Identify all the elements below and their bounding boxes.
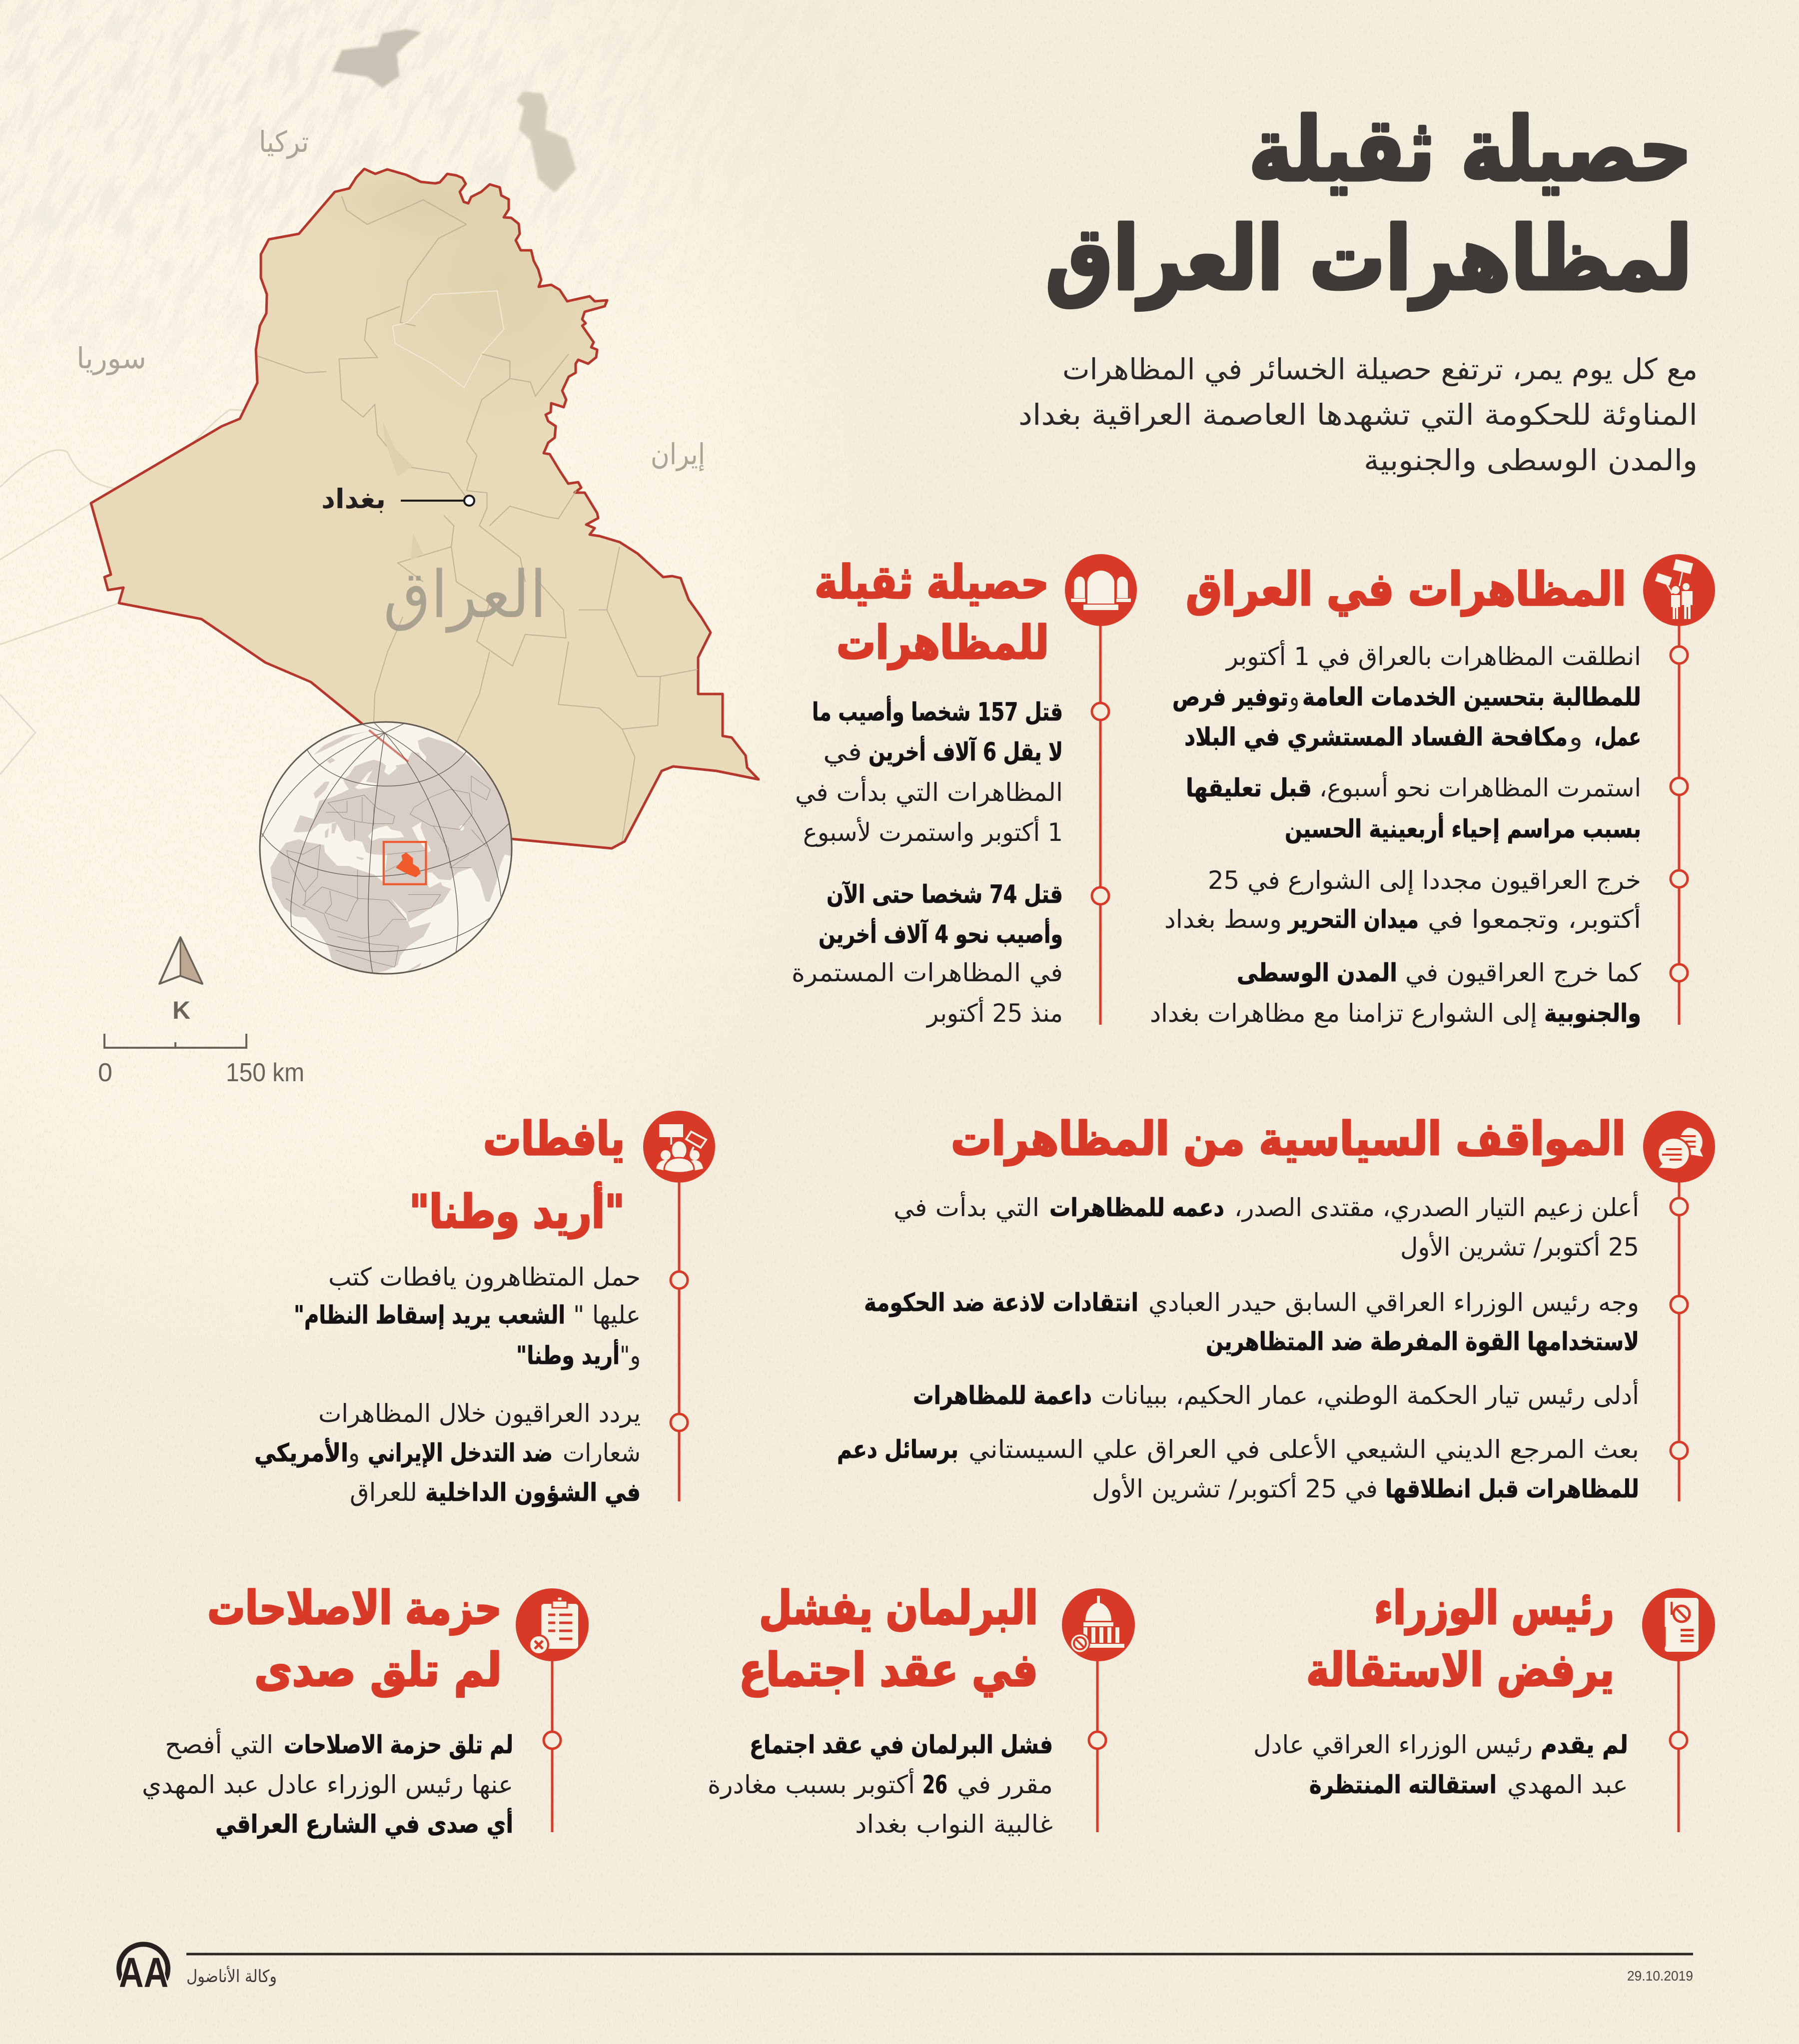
body text: كما خرج العراقيون في: [1405, 958, 1641, 987]
body text: الأمريكي: [254, 1437, 348, 1468]
body text: في المظاهرات المستمرة: [792, 958, 1063, 987]
body text: استمرت المظاهرات نحو أسبوع،: [1319, 771, 1641, 802]
body text: أكتوبر بسبب مغادرة: [708, 1768, 915, 1799]
map of Iraq: [91, 115, 759, 848]
panel: banners: [254, 1111, 715, 1507]
timeline: [1089, 1656, 1106, 1832]
body text: و": [620, 1341, 641, 1370]
body text: المدن الوسطى: [1237, 958, 1397, 988]
intro text: والمدن الوسطى والجنوبية: [1364, 443, 1698, 478]
body text: [1150, 640, 1641, 1028]
body text: في: [823, 737, 862, 766]
panel: prime minister: [1253, 1581, 1715, 1832]
panel: protests in Iraq: [1150, 554, 1715, 1028]
body text: أكتوبر، وتجمعوا في: [1428, 903, 1641, 934]
body text: حمل المتظاهرون يافطات كتب: [328, 1263, 641, 1292]
body text: و: [1288, 682, 1299, 712]
timeline: [1092, 625, 1109, 1025]
body text: رئيس الوزراء العراقي عادل: [1253, 1730, 1533, 1759]
scale bar: 150 km: [226, 1058, 304, 1087]
heading: رئيس الوزراء: [1374, 1581, 1614, 1635]
Baghdad marker: بغداد: [321, 483, 386, 515]
body text: أريد وطنا": [516, 1339, 620, 1370]
body text: والجنوبية: [1544, 999, 1641, 1028]
intro text: مع كل يوم يمر، ترتفع حصيلة الخسائر في المظاهرات: [1062, 352, 1698, 387]
body text: بعث المرجع الديني الشيعي الأعلى في العراق علي السيستاني: [968, 1434, 1639, 1464]
body text: دعمه للمظاهرات: [1049, 1193, 1224, 1223]
timeline: [671, 1179, 688, 1501]
footer: [119, 1944, 1693, 1996]
north arrow: K: [172, 996, 190, 1024]
agency name: وكالة الأناضول: [186, 1966, 277, 1987]
body text: و: [1568, 722, 1583, 752]
body text: بسبب مراسم إحياء أربعينية الحسين: [1285, 812, 1641, 844]
Baghdad marker: [321, 483, 474, 515]
timeline: [544, 1656, 561, 1832]
heading: [815, 556, 1049, 670]
panel: heavy toll: [792, 554, 1137, 1028]
body text: مقرر في: [957, 1770, 1053, 1799]
body text: و: [347, 1438, 360, 1468]
body text: الشعب يريد إسقاط النظام": [294, 1301, 565, 1330]
icon: capitol with prohibition: [1062, 1588, 1135, 1661]
icon: crowd with signs: [643, 1111, 715, 1183]
heading: "أريد وطنا": [409, 1182, 625, 1239]
body text: للمظاهرات قبل انطلاقها: [1385, 1474, 1639, 1504]
heading: في عقد اجتماع: [739, 1643, 1038, 1697]
heading: المظاهرات في العراق: [1186, 563, 1626, 617]
heading: المواقف السياسية من المظاهرات: [951, 1112, 1626, 1166]
body text: عبد المهدي: [1507, 1770, 1628, 1800]
body text: 26: [922, 1770, 947, 1799]
body text: غالبية النواب بغداد: [855, 1810, 1053, 1839]
timeline: [1670, 1656, 1687, 1832]
heading: [207, 1581, 502, 1697]
body text: أدلى رئيس تيار الحكمة الوطني، عمار الحكيم، ببيانات: [1101, 1379, 1639, 1410]
body text: [1253, 1730, 1628, 1800]
body text: ضد التدخل الإيراني: [368, 1438, 553, 1468]
body text: المظاهرات التي بدأت في: [795, 776, 1063, 807]
panel: political positions: [837, 1111, 1715, 1504]
body text: قبل تعليقها: [1186, 773, 1312, 803]
heading: للمظاهرات: [837, 616, 1049, 670]
body text: قتل 74 شخصا حتى الآن: [827, 880, 1063, 909]
timeline: [1671, 625, 1688, 1025]
body text: في الشؤون الداخلية: [425, 1478, 641, 1507]
body text: 1 أكتوبر واستمرت لأسبوع: [803, 816, 1063, 847]
map label: Syria: سوريا: [76, 341, 146, 376]
heading: حصيلة ثقيلة: [815, 556, 1049, 609]
heading: البرلمان يفشل: [759, 1581, 1038, 1635]
body text: توفير فرص: [1172, 682, 1288, 712]
body text: استقالته المنتظرة: [1309, 1770, 1497, 1800]
icon: memorial arches: [1065, 554, 1137, 626]
title: حصيلة ثقيلة: [1249, 99, 1692, 201]
title: لمظاهرات العراق: [1045, 208, 1692, 310]
body text: 25 أكتوبر/ تشرين الأول: [1400, 1231, 1639, 1262]
body text: مكافحة الفساد المستشري في البلاد: [1184, 722, 1568, 752]
locator globe: [260, 722, 512, 974]
icon: clipboard with x: [516, 1588, 589, 1661]
body text: في 25 أكتوبر/ تشرين الأول: [1092, 1472, 1378, 1504]
body text: لا يقل 6 آلاف أخرين: [869, 735, 1063, 767]
body text: [142, 1728, 513, 1839]
body text: برسائل دعم: [837, 1435, 958, 1464]
date: 29.10.2019: [1627, 1968, 1693, 1984]
body text: يردد العراقيون خلال المظاهرات: [318, 1399, 641, 1428]
body text: قتل 157 شخصا وأصيب ما: [812, 695, 1063, 727]
body text: عليها ": [573, 1301, 641, 1330]
icon: document with prohibition: [1642, 1588, 1715, 1661]
body text: أي صدى في الشارع العراقي: [215, 1808, 513, 1839]
body text: منذ 25 أكتوبر: [925, 997, 1063, 1028]
body text: لم تلق حزمة الاصلاحات: [284, 1730, 513, 1760]
logo: Anadolu Agency: AA: [119, 1949, 168, 1996]
panel: parliament: [708, 1581, 1135, 1839]
body text: [837, 1191, 1639, 1504]
body text: [254, 1263, 641, 1507]
body text: [792, 695, 1063, 1028]
heading: حزمة الاصلاحات: [207, 1581, 502, 1635]
body text: شعارات: [563, 1438, 641, 1467]
body text: خرج العراقيون مجددا إلى الشوارع في 25: [1208, 866, 1641, 895]
body text: للعراق: [350, 1478, 417, 1507]
body text: انطلقت المظاهرات بالعراق في 1 أكتوبر: [1225, 640, 1641, 671]
body text: وأصيب نحو 4 آلاف أخرين: [819, 918, 1063, 949]
body text: لم يقدم: [1541, 1730, 1628, 1759]
body text: التي أفصح: [165, 1728, 273, 1760]
body text: للمطالبة بتحسين الخدمات العامة: [1302, 682, 1641, 712]
body text: [708, 1730, 1053, 1839]
map label: Iran: إيران: [651, 437, 705, 472]
heading: [739, 1581, 1038, 1697]
icon: speech bubbles: [1643, 1111, 1715, 1183]
scale bar: 0: [98, 1058, 112, 1087]
icon: protesters: [1643, 554, 1715, 626]
heading: يافطات: [483, 1112, 625, 1166]
north arrow: [159, 937, 202, 1024]
map label: Iraq: العراق: [383, 557, 547, 633]
map label: Turkey: تركيا: [259, 125, 309, 159]
heading: يرفض الاستقالة: [1306, 1643, 1614, 1697]
body text: وجه رئيس الوزراء العراقي السابق حيدر العبادي: [1148, 1288, 1639, 1318]
panel: reform package: [142, 1581, 589, 1839]
body text: داعمة للمظاهرات: [913, 1381, 1092, 1410]
heading: لم تلق صدى: [254, 1643, 502, 1697]
intro text: المناوئة للحكومة التي تشهدها العاصمة العراقية بغداد: [1018, 398, 1698, 432]
title: [1045, 99, 1692, 310]
body text: عنها رئيس الوزراء عادل عبد المهدي: [142, 1770, 513, 1800]
body text: لاستخدامها القوة المفرطة ضد المتظاهرين: [1206, 1327, 1639, 1357]
intro text: [1018, 352, 1698, 478]
body text: أعلن زعيم التيار الصدري، مقتدى الصدر،: [1234, 1191, 1639, 1222]
body text: فشل البرلمان في عقد اجتماع: [750, 1730, 1053, 1760]
body text: إلى الشوارع تزامنا مع مظاهرات بغداد: [1150, 999, 1537, 1028]
body text: التي بدأت في: [894, 1191, 1039, 1222]
heading: [409, 1112, 625, 1239]
body text: وسط بغداد: [1164, 905, 1282, 934]
body text: عمل،: [1594, 722, 1641, 751]
scale bar: [98, 1034, 304, 1087]
lakes north of Iraq: [332, 29, 576, 193]
body text: ميدان التحرير: [1287, 905, 1419, 934]
timeline: [1671, 1179, 1688, 1501]
body text: انتقادات لاذعة ضد الحكومة: [864, 1288, 1138, 1318]
heading: [1306, 1581, 1614, 1697]
